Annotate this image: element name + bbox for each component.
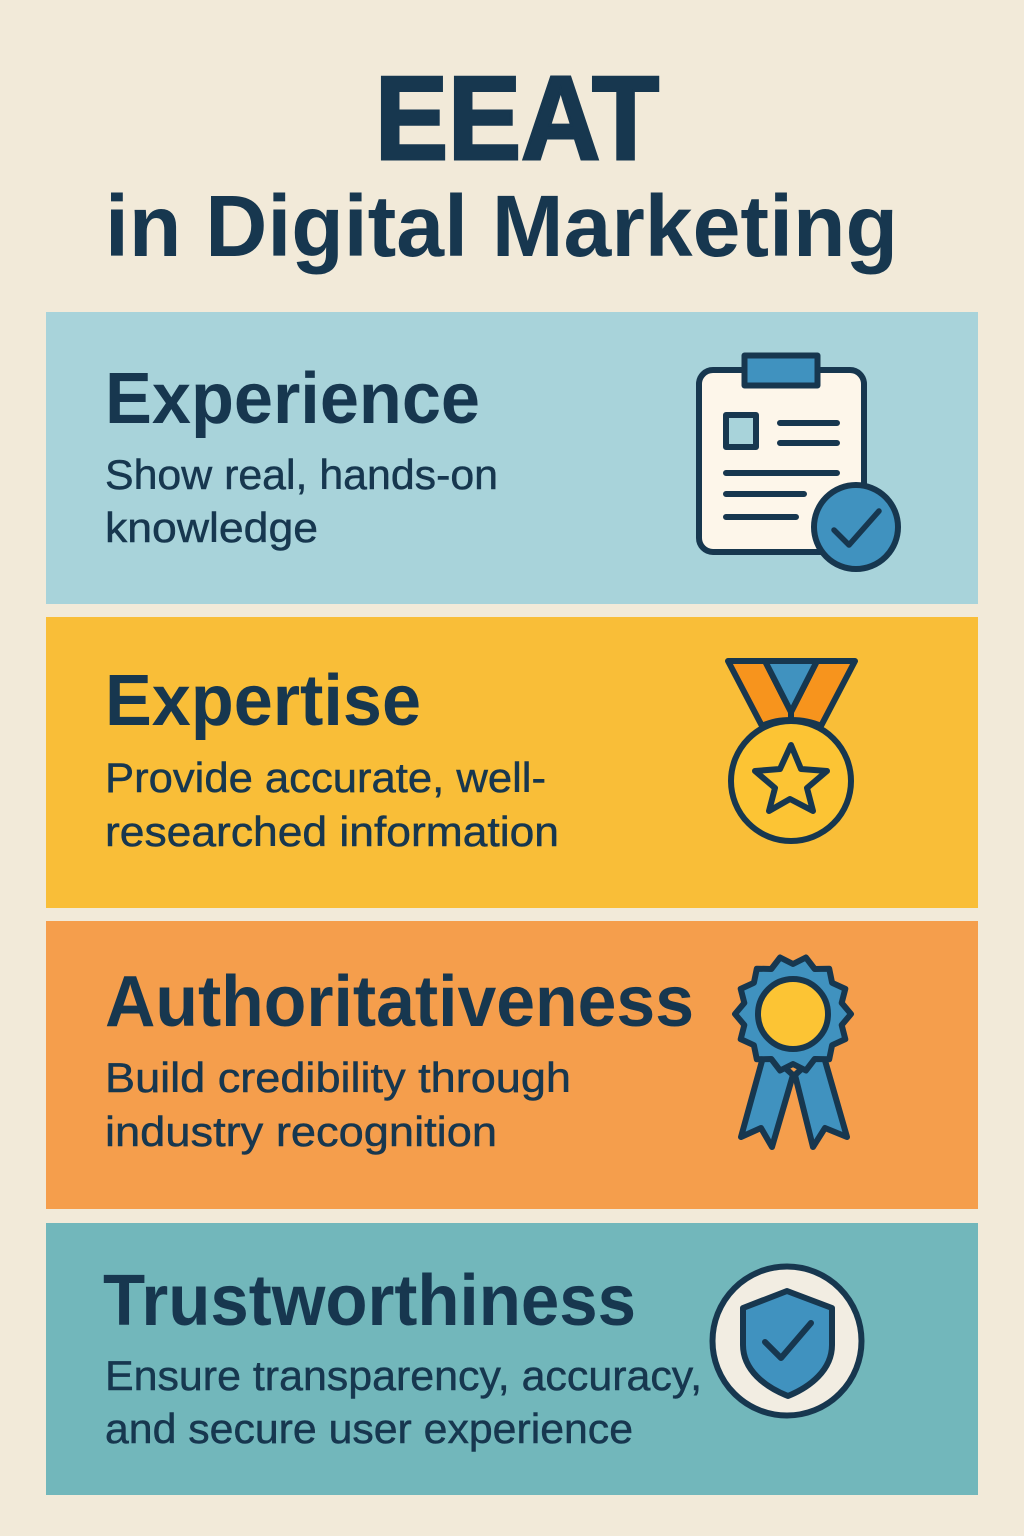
text: Experience description xyxy=(105,451,498,551)
text: Expertise description: Provide accurate, well- xyxy=(105,754,546,801)
panel: Authoritativeness xyxy=(46,921,978,1209)
icon: shield with checkmark xyxy=(712,1266,862,1416)
heading: Authoritativeness: Authoritativeness xyxy=(105,962,694,1042)
panel: Expertise xyxy=(46,617,978,908)
title xyxy=(105,52,898,275)
text: Experience description: Show real, hands-on xyxy=(105,451,498,498)
text: Trustworthiness description: and secure user experience xyxy=(105,1405,633,1452)
text: Expertise description: researched information xyxy=(105,808,559,855)
icon: award rosette xyxy=(735,958,851,1147)
heading: Trustworthiness: Trustworthiness xyxy=(103,1261,636,1341)
text: Trustworthiness description xyxy=(105,1352,702,1452)
title: in Digital Marketing xyxy=(105,178,898,275)
heading: Experience: Experience xyxy=(105,359,480,439)
text: Authoritativeness description: industry recognition xyxy=(105,1108,497,1155)
text: Expertise description xyxy=(105,754,559,855)
text: Authoritativeness description xyxy=(105,1054,571,1155)
text: Authoritativeness description: Build credibility through xyxy=(105,1054,571,1101)
text: Experience description: knowledge xyxy=(105,504,318,551)
heading: Expertise: Expertise xyxy=(105,661,421,741)
panel: Trustworthiness xyxy=(46,1223,978,1495)
title: EEAT xyxy=(375,52,659,185)
text: Trustworthiness description: Ensure transparency, accuracy, xyxy=(105,1352,702,1399)
icon: clipboard with checkmark xyxy=(699,356,898,569)
panel: Experience xyxy=(46,312,978,604)
icon: medal with star xyxy=(728,661,855,841)
